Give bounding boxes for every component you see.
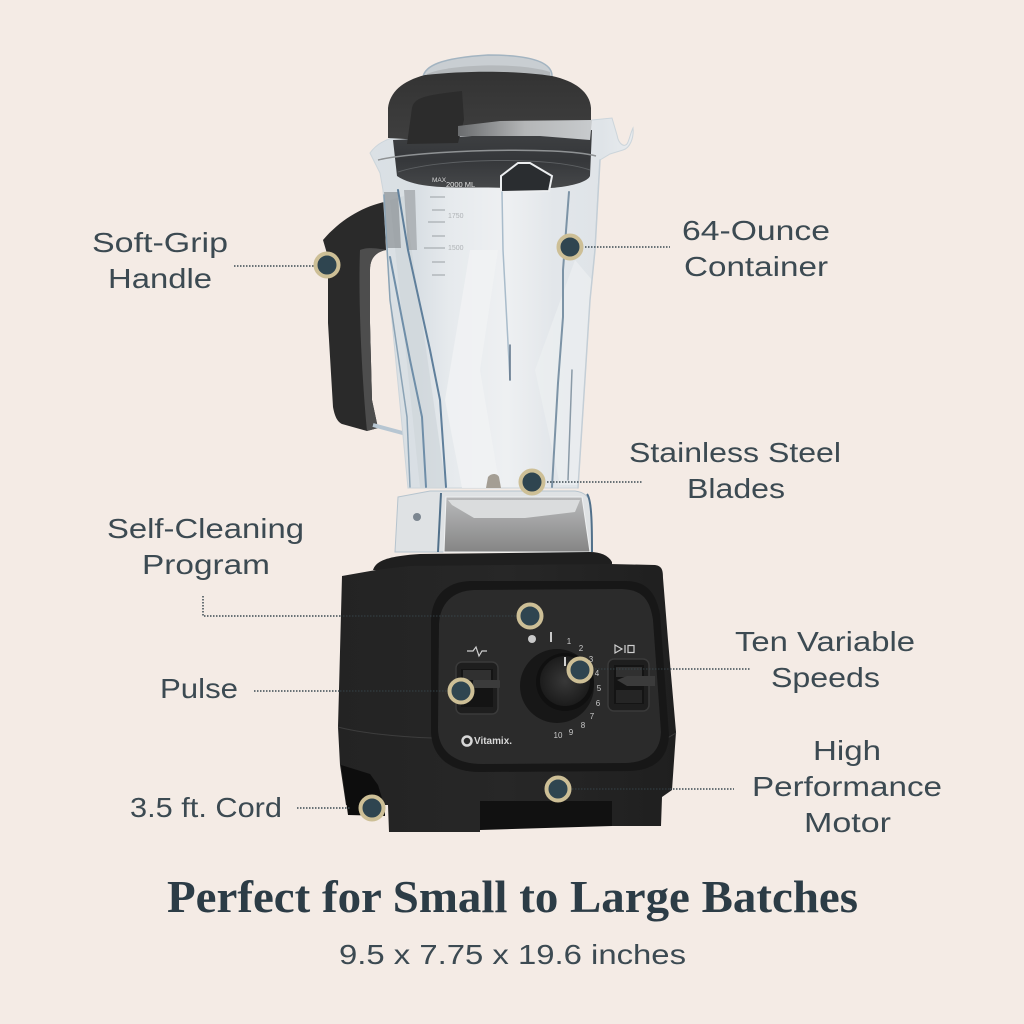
callout markers <box>316 236 592 820</box>
speed numbers: 2 <box>579 644 584 653</box>
speed numbers: 8 <box>581 721 586 730</box>
base top collar <box>373 552 612 572</box>
label: stainless steel blades: Stainless Steel <box>629 437 841 468</box>
capacity text: 1500 <box>448 245 464 252</box>
label: high performance motor: Motor <box>804 807 891 838</box>
clean icon <box>528 632 552 643</box>
speed numbers: 1 <box>567 637 572 646</box>
label: stainless steel blades <box>629 437 841 504</box>
label: stainless steel blades: Blades <box>687 473 785 504</box>
lid cap <box>423 55 552 82</box>
label: ten variable speeds: Speeds <box>771 662 880 693</box>
capacity text: 2000 ML <box>446 180 475 189</box>
dimensions: 9.5 x 7.75 x 19.6 inches <box>339 939 686 970</box>
label: cord: 3.5 ft. Cord <box>130 792 282 823</box>
label: soft-grip handle <box>92 227 228 294</box>
speed numbers: 10 <box>554 731 563 740</box>
glass edge lines <box>384 160 600 488</box>
speed numbers: 5 <box>597 684 602 693</box>
blender illustration <box>323 55 676 832</box>
label: ten variable speeds: Ten Variable <box>735 626 915 657</box>
speed numbers: 7 <box>590 712 595 721</box>
container <box>370 118 633 488</box>
measurement scale <box>424 197 445 275</box>
capacity text <box>432 177 475 252</box>
speed numbers: 6 <box>596 699 601 708</box>
label: high performance motor: High <box>813 735 881 766</box>
label: self-cleaning program <box>107 513 304 580</box>
label: ten variable speeds <box>735 626 915 693</box>
label: self-cleaning program: Program <box>142 549 270 580</box>
base body <box>338 564 676 832</box>
pulse switch <box>456 662 500 714</box>
label: 64-ounce container <box>682 215 830 282</box>
pulse icon <box>467 647 487 656</box>
lid <box>388 72 592 144</box>
capacity text: 1750 <box>448 213 464 220</box>
speed numbers <box>554 637 602 740</box>
label: soft-grip handle: Soft-Grip <box>92 227 228 258</box>
center pillar <box>501 163 552 192</box>
label: 64-ounce container: 64-Ounce <box>682 215 830 246</box>
leader lines <box>203 247 750 808</box>
speed numbers: 4 <box>595 669 600 678</box>
label: pulse: Pulse <box>160 673 238 704</box>
base foot shadow <box>480 801 612 830</box>
logo: Vitamix. <box>474 736 512 747</box>
label: high performance motor <box>752 735 942 838</box>
label: soft-grip handle: Handle <box>108 263 212 294</box>
cord recess <box>341 765 385 816</box>
start stop switch <box>608 659 655 711</box>
container collar <box>395 491 592 552</box>
handle <box>323 202 410 435</box>
blade nut <box>486 474 501 488</box>
label: high performance motor: Performance <box>752 771 942 802</box>
control panel <box>431 581 669 772</box>
base seam <box>338 727 676 740</box>
title: Perfect for Small to Large Batches <box>167 871 858 922</box>
speed knob <box>520 649 594 723</box>
inner panels <box>390 196 446 488</box>
label: 64-ounce container: Container <box>684 251 828 282</box>
capacity text: MAX <box>432 177 447 184</box>
speed numbers: 9 <box>569 728 574 737</box>
label: self-cleaning program: Self-Cleaning <box>107 513 304 544</box>
start stop icon <box>615 645 634 653</box>
speed numbers: 3 <box>589 655 594 664</box>
